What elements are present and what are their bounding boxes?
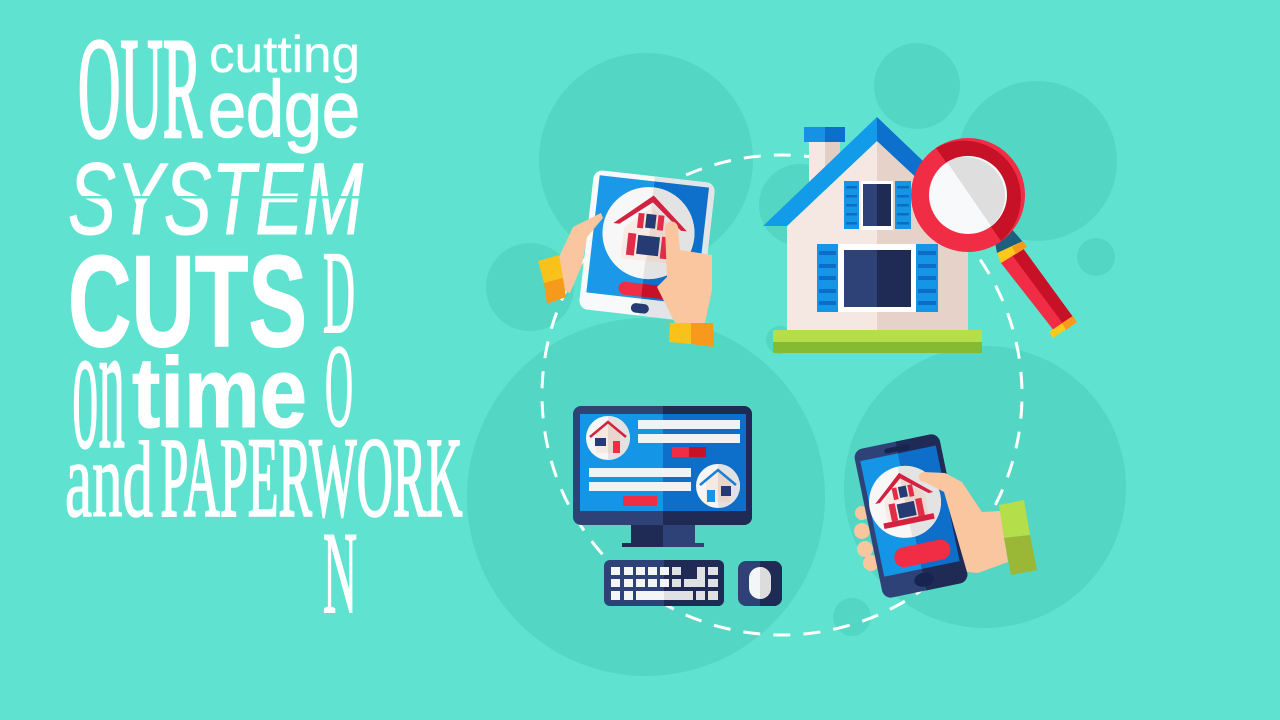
headline text	[65, 10, 462, 638]
fingers behind phone	[854, 506, 879, 571]
headline text: edge	[208, 64, 360, 154]
mouse	[738, 561, 782, 606]
icon: smartphone in hand	[853, 433, 1037, 599]
house body	[763, 117, 991, 353]
icon: house with magnifier	[763, 117, 1077, 353]
screen content	[586, 416, 740, 508]
dashed connecting ring	[542, 155, 1022, 635]
upper window	[861, 181, 893, 230]
keyboard	[604, 560, 724, 606]
magnifying glass	[911, 138, 1077, 338]
headline text: time	[132, 337, 307, 449]
chimney	[804, 127, 845, 202]
mini house	[870, 467, 939, 530]
icon: tablet held in hand	[538, 170, 716, 347]
headline text: cutting	[209, 26, 360, 84]
mini house	[610, 191, 691, 265]
infographic canvas: PAPERWORK	[160, 416, 462, 540]
headline text: on	[72, 286, 125, 487]
background circles	[467, 43, 1126, 676]
lawn	[773, 330, 982, 342]
lower window	[838, 244, 916, 312]
headline text: OUR	[78, 10, 202, 168]
headline text: SYSTEM	[68, 142, 363, 256]
headline text: and	[65, 421, 153, 540]
headline text: CUTS	[68, 228, 307, 374]
headline text: O	[325, 320, 353, 452]
headline text: N	[323, 509, 357, 638]
icon: desktop computer	[573, 406, 782, 606]
right hand	[657, 222, 712, 323]
left hand	[559, 213, 603, 293]
holding hand	[919, 472, 1008, 573]
headline text: D	[323, 227, 355, 358]
